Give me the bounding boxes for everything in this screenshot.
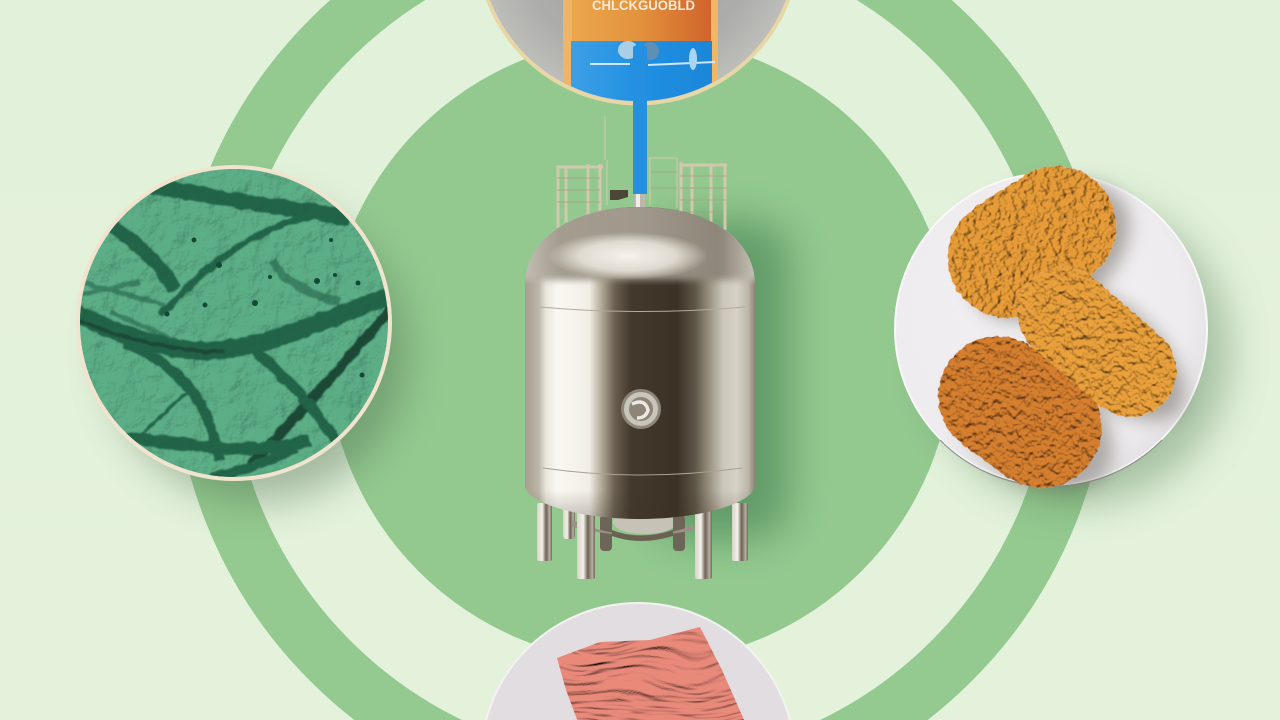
railing [557,116,727,230]
panel: shadows [108,200,1230,540]
minced meat [557,627,744,720]
outer ring [202,0,1080,720]
arrow: feed tube [633,44,647,194]
panel: liquid feedstock bag [486,0,790,106]
bag blue section [571,41,712,101]
icon: bioreactor tank [525,190,755,579]
nugget bottom [914,312,1126,512]
nugget middle [999,248,1195,436]
panel: plate of breaded nuggets [895,143,1208,520]
inner disc [327,37,953,663]
nugget top [925,143,1139,341]
panel: mycelium micrograph [60,165,400,481]
panel: plate of minced meat [481,600,795,720]
tank nozzle [610,190,645,216]
tank legs [537,503,748,579]
bag orange label [572,0,711,41]
tank shell [525,207,755,519]
tank port [621,389,661,429]
